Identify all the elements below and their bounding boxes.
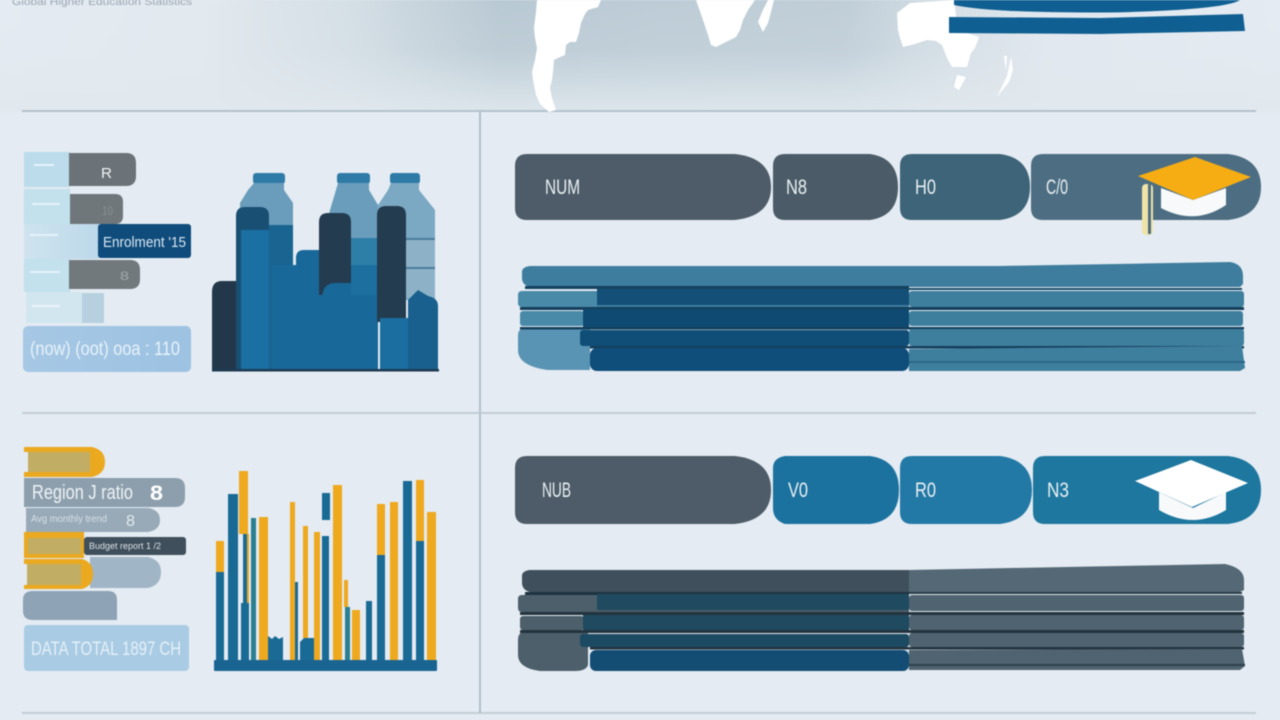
row 4 — [580, 633, 1244, 650]
navy bar one — [954, 0, 1240, 13]
world map — [532, 0, 1013, 112]
pill 3 — [900, 154, 1030, 220]
book two with dark label: Budget report 1 /2 — [89, 541, 161, 551]
pill 4 — [1033, 456, 1261, 524]
pill 4: N3 — [1047, 479, 1069, 502]
plain bar — [23, 591, 117, 620]
bar chart: blue and yellow columns — [214, 471, 437, 671]
row 3 — [520, 615, 1244, 633]
pill 2: V0 — [788, 479, 808, 502]
navy bar two — [949, 14, 1245, 34]
pill 1: NUB — [542, 479, 571, 502]
footer label: DATA TOTAL 1897 CH — [31, 639, 181, 660]
panel: upper right stacked rows — [518, 262, 1245, 371]
pill 1: NUM — [545, 176, 580, 199]
stack background left blob — [518, 327, 590, 370]
row 2 — [518, 594, 1244, 615]
row 5 — [590, 649, 1245, 671]
map: small island — [954, 75, 966, 90]
map: thin slivers — [997, 56, 1013, 97]
back bottles — [240, 173, 435, 300]
row 1 — [522, 262, 1243, 290]
pill 2 — [773, 154, 898, 220]
yellow bars — [216, 471, 436, 660]
panel: upper right header pills — [515, 154, 1261, 235]
row 4: 8 — [120, 269, 129, 283]
pill 2: N8 — [786, 176, 807, 199]
row 2: 10 — [102, 204, 113, 218]
row 5 — [26, 292, 104, 323]
bar chart: bottle columns — [212, 173, 439, 372]
icon: white graduation cap — [1135, 460, 1248, 520]
row 3 — [520, 309, 1244, 330]
book one — [24, 447, 105, 477]
footer label — [24, 625, 189, 671]
front columns — [212, 206, 439, 372]
footer label: (now) (oot) ooa : 110 — [30, 339, 180, 360]
row 3 highlight — [24, 224, 191, 259]
pill 4 — [1031, 154, 1261, 220]
bar with label: 8 — [150, 482, 163, 505]
pill 3 — [900, 456, 1032, 524]
map: africa — [696, 0, 755, 47]
row 1 — [24, 152, 136, 187]
map: south america — [532, 0, 601, 112]
panel: upper left ranked list — [23, 152, 191, 372]
row 2 — [518, 289, 1244, 310]
pill 1 — [515, 154, 771, 220]
book two with dark label — [24, 532, 186, 558]
footer label — [23, 326, 191, 372]
row 1: R — [101, 165, 112, 182]
stack background left blob — [518, 630, 588, 671]
bar with label — [24, 478, 185, 507]
chart baseline — [214, 660, 437, 671]
row 5 — [590, 346, 1245, 371]
book three — [24, 557, 161, 589]
map: asia and australia landmass — [897, 0, 979, 67]
pill 2 — [773, 456, 899, 524]
row 2 — [24, 189, 123, 224]
bar with small label — [26, 508, 160, 532]
bar with small label: 8 — [126, 513, 135, 530]
bar with small label: Avg monthly trend — [31, 514, 107, 525]
blue bars — [216, 481, 424, 660]
map: island sliver — [758, 0, 774, 32]
pill 4: C/0 — [1046, 176, 1068, 199]
row 1 — [522, 564, 1244, 595]
pill 3: R0 — [915, 479, 936, 502]
panel: lower right header pills — [515, 456, 1261, 524]
teal bars — [251, 518, 350, 660]
row 4 — [24, 259, 140, 292]
pill 1 — [515, 456, 771, 524]
icon: yellow graduation cap — [1138, 157, 1251, 235]
row 4 — [580, 329, 1244, 348]
bar with label: Region J ratio — [32, 482, 133, 504]
pill 3: H0 — [915, 176, 936, 199]
panel: lower right stacked rows — [518, 564, 1245, 671]
panel: lower left book stack list — [23, 447, 189, 671]
row 3 highlight: Enrolment '15 — [103, 234, 186, 251]
top navy bars — [949, 0, 1245, 34]
